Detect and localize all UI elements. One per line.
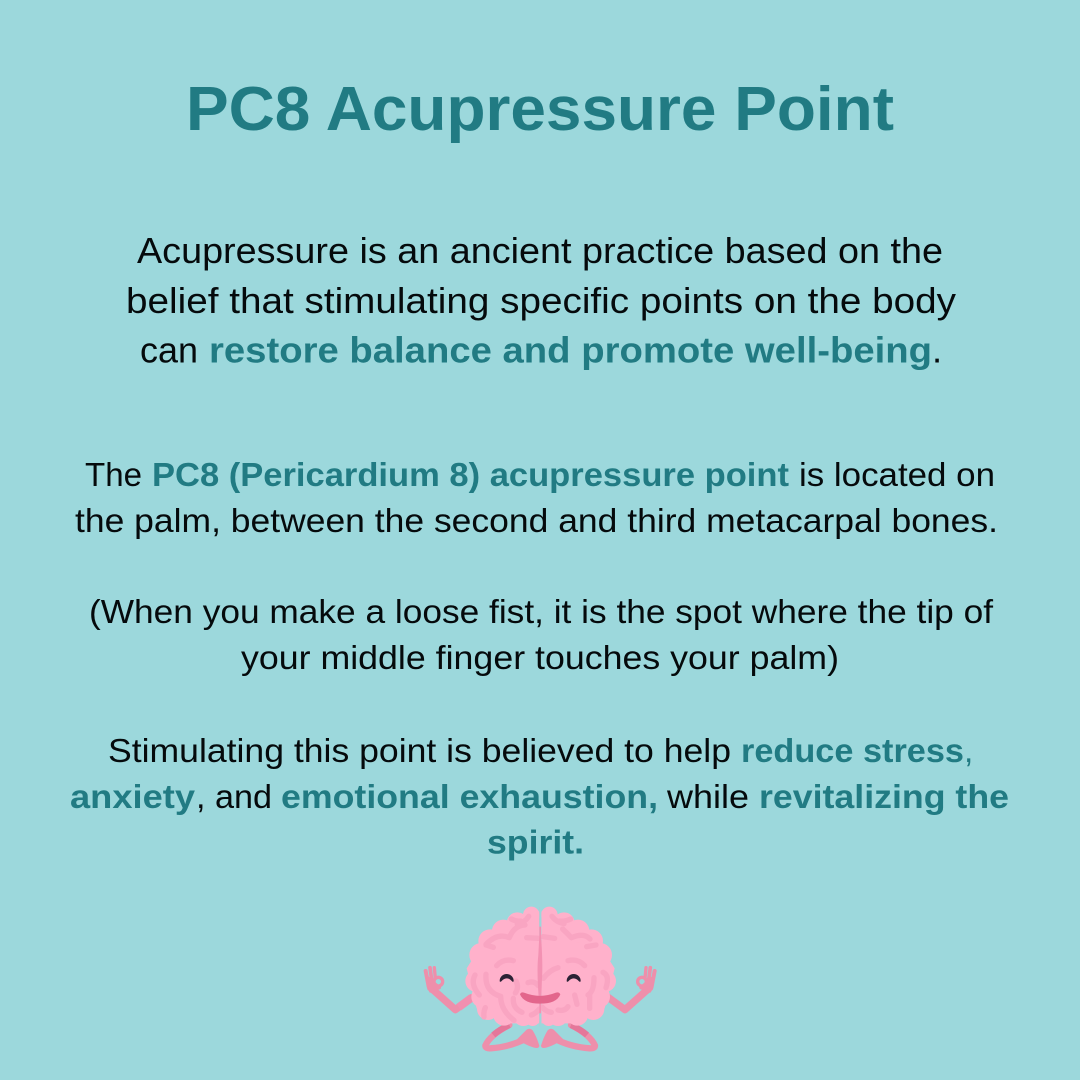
icon: right arm and hand (609, 968, 655, 1010)
text block: benefits: while (666, 779, 749, 816)
text block: benefits (70, 733, 1009, 862)
text block: benefits: Stimulating this point is believed to help (108, 733, 731, 770)
text block: loose fist note: your middle finger touches your palm) (241, 640, 839, 677)
icon: left arm and hand (426, 968, 472, 1010)
text block: benefits: , and (196, 779, 272, 816)
text block: PC8 location: PC8 (Pericardium 8) acupressure point (152, 457, 789, 494)
icon: left eye (500, 974, 514, 982)
text block: acupressure introduction: belief that stimulating specific points on the body (126, 280, 957, 321)
text block: benefits: , (964, 733, 973, 770)
text block: benefits: reduce stress (741, 733, 964, 770)
icon: brain left hemisphere (465, 907, 540, 1026)
text block: acupressure introduction: can (140, 330, 198, 370)
text block: loose fist note (89, 594, 994, 677)
icon: brain right hemisphere (541, 907, 616, 1026)
text block: benefits: emotional exhaustion, (281, 779, 658, 816)
icon: right eye (567, 974, 581, 982)
text block: acupressure introduction: restore balance and promote well-being (209, 330, 932, 370)
icon: meditating brain mascot (426, 905, 655, 1048)
text block: PC8 location: is located on (799, 457, 995, 494)
text block: benefits: anxiety (70, 779, 195, 816)
text block: loose fist note: (When you make a loose fist, it is the spot where the tip of (89, 594, 994, 631)
title: PC8 Acupressure Point (186, 75, 894, 144)
text block: PC8 location (75, 457, 998, 540)
text block: acupressure introduction: . (932, 330, 942, 370)
text block: acupressure introduction (126, 230, 957, 370)
icon: smile (520, 992, 560, 1004)
text block: benefits: spirit. (487, 824, 584, 862)
text block: acupressure introduction: Acupressure is an ancient practice based on the (137, 230, 943, 271)
icon: crossed legs (485, 1025, 595, 1048)
icon: brain midline (538, 907, 542, 1027)
text block: benefits: revitalizing the (759, 779, 1009, 816)
text block: PC8 location: The (85, 457, 142, 494)
text block: PC8 location: the palm, between the second and third metacarpal bones. (75, 503, 998, 540)
